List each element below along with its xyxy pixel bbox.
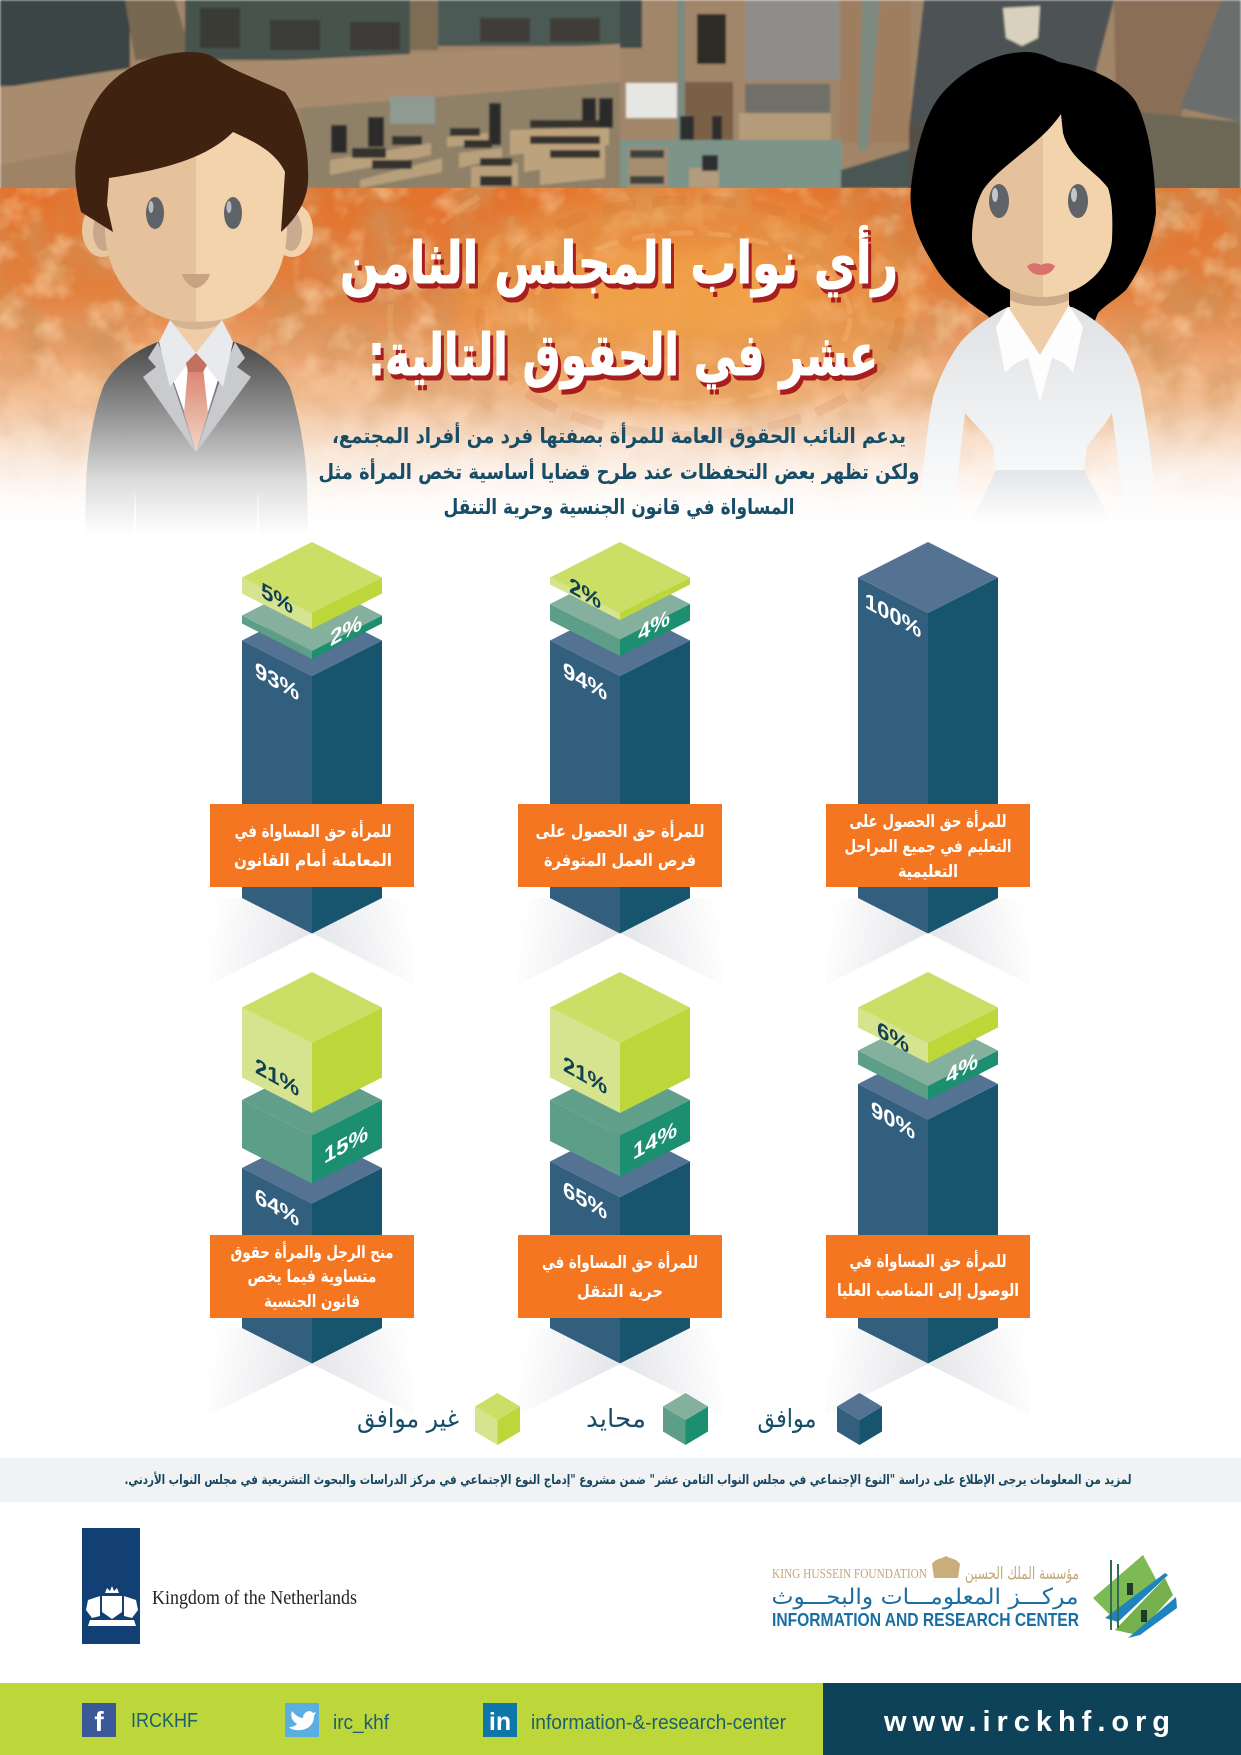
logo: Information and Research Center: KING HUSSEIN FOUNDATION bbox=[772, 1567, 927, 1582]
man: jacket bbox=[85, 342, 308, 535]
chart column: access to available jobs: 2% bbox=[569, 573, 601, 615]
man: hair bbox=[75, 52, 308, 232]
logo: Information and Research Center: مركـــز المعلومـــات والبحـــوث bbox=[772, 1585, 1078, 1610]
linkedin handle: information-&-research-center bbox=[531, 1712, 786, 1734]
icon: twitter bbox=[285, 1703, 319, 1737]
title: رأي نواب المجلس الثامن bbox=[340, 225, 898, 298]
woman: neck bbox=[1010, 285, 1069, 356]
woman: hair bbox=[910, 52, 1156, 328]
man: tie bbox=[184, 353, 208, 452]
chart column: education: للمرأة حق الحصول على bbox=[850, 810, 1006, 832]
woman: lips bbox=[1027, 263, 1055, 275]
intro text bbox=[318, 421, 920, 519]
man: chin shadow bbox=[170, 314, 222, 330]
man: collar bbox=[159, 320, 233, 387]
chart column: nationality law: 64% bbox=[255, 1184, 299, 1232]
intro text: يدعم النائب الحقوق العامة للمرأة بصفتها فرد من أفراد المجتمع، bbox=[332, 421, 906, 448]
woman: chin shadow bbox=[1010, 290, 1069, 306]
logo: Information and Research Center bbox=[772, 1555, 1177, 1638]
chart column: access to available jobs: فرص العمل المتوفرة bbox=[544, 851, 696, 871]
header photo: parliament chamber bbox=[0, 0, 1241, 190]
chart column: top positions: للمرأة حق المساواة في bbox=[850, 1250, 1006, 1272]
legend: neutral bbox=[586, 1393, 708, 1445]
woman: shirt bbox=[920, 307, 1157, 527]
chart column: nationality law: قانون الجنسية bbox=[264, 1292, 360, 1312]
chart column: equality before the law: للمرأة حق المساواة في bbox=[234, 820, 392, 842]
woman: eyes bbox=[989, 184, 1088, 218]
footer bar bbox=[0, 1683, 1241, 1755]
twitter handle: irc_khf bbox=[333, 1712, 389, 1734]
woman: collar bbox=[996, 305, 1083, 402]
legend: neutral: محايد bbox=[586, 1404, 646, 1433]
legend: disagree: غير موافق bbox=[357, 1404, 459, 1433]
title: عشر في الحقوق التالية: bbox=[368, 321, 878, 390]
chart column: education: التعليمية bbox=[898, 862, 958, 882]
chart column: nationality law: متساوية فيما يخص bbox=[248, 1267, 376, 1287]
chart column: equality before the law: 2% bbox=[330, 610, 362, 652]
column shadows bbox=[209, 898, 1030, 1415]
legend: agree bbox=[758, 1393, 882, 1445]
chart column: education: 100% bbox=[865, 588, 921, 644]
chart column: nationality law: منح الرجل والمرأة حقوق bbox=[230, 1241, 394, 1263]
chart column: freedom of movement: 14% bbox=[633, 1117, 677, 1165]
legend: disagree bbox=[357, 1393, 520, 1445]
header orange overlay with chamber texture bbox=[0, 188, 1241, 500]
chart column: nationality law: 15% bbox=[324, 1121, 368, 1169]
chart column: access to available jobs: 94% bbox=[563, 658, 607, 706]
logo: Information and Research Center: INFORMATION AND RESEARCH CENTER bbox=[772, 1610, 1079, 1630]
man: face bbox=[105, 130, 287, 322]
chart column: freedom of movement bbox=[518, 972, 722, 1364]
man: shirt front bbox=[173, 353, 218, 447]
chart column: freedom of movement: للمرأة حق المساواة في bbox=[542, 1251, 698, 1273]
icon: linkedin: in bbox=[489, 1708, 511, 1736]
man: neck bbox=[170, 298, 222, 356]
icon: coat of arms bbox=[86, 1586, 138, 1626]
title bbox=[340, 225, 898, 390]
chart column: education: التعليم في جميع المراحل bbox=[844, 837, 1012, 857]
woman: skirt bbox=[970, 470, 1113, 525]
chart column: top positions: 90% bbox=[871, 1097, 915, 1145]
woman: face bbox=[972, 114, 1112, 297]
logo: Information and Research Center: مؤسسة الملك الحسين bbox=[965, 1564, 1079, 1584]
icon: IRC mark bbox=[1093, 1555, 1177, 1638]
chart column: top positions: 6% bbox=[877, 1017, 909, 1059]
legend bbox=[357, 1393, 882, 1445]
logo: Kingdom of the Netherlands bbox=[82, 1528, 357, 1644]
woman character bbox=[910, 52, 1157, 527]
chart column: equality before the law: 93% bbox=[255, 658, 299, 706]
chart column: equality before the law bbox=[210, 542, 414, 934]
chart column: access to available jobs bbox=[518, 542, 722, 934]
more information strip bbox=[0, 1458, 1241, 1502]
intro text: ولكن تظهر بعض التحفظات عند طرح قضايا أساسية تخص المرأة مثل bbox=[318, 457, 920, 484]
man: lapels bbox=[143, 342, 251, 453]
icon: linkedin bbox=[483, 1703, 517, 1737]
legend: agree: موافق bbox=[758, 1404, 816, 1433]
man: nose bbox=[182, 274, 210, 288]
logo: Kingdom of the Netherlands: Kingdom of the Netherlands bbox=[152, 1587, 357, 1609]
man: eyes bbox=[146, 197, 242, 229]
man: sleeve slits bbox=[133, 490, 260, 535]
chart column: freedom of movement: 21% bbox=[563, 1052, 607, 1100]
chart column: equality before the law: 5% bbox=[261, 578, 293, 620]
facebook handle: IRCKHF bbox=[131, 1710, 198, 1732]
chart column: freedom of movement: 65% bbox=[563, 1177, 607, 1225]
icon: facebook bbox=[82, 1703, 116, 1737]
man: ears bbox=[82, 203, 313, 257]
chart column: education bbox=[826, 542, 1030, 934]
icon: crown bbox=[932, 1556, 960, 1578]
chart column: access to available jobs: 4% bbox=[638, 605, 670, 647]
chart column: nationality law: 21% bbox=[255, 1054, 299, 1102]
chart column: access to available jobs: للمرأة حق الحصول على bbox=[536, 820, 704, 842]
chart column: nationality law bbox=[210, 972, 414, 1364]
chart column: top positions: الوصول إلى المناصب العليا bbox=[837, 1281, 1019, 1301]
chart column: top positions: 4% bbox=[946, 1048, 978, 1090]
chart column: top positions bbox=[826, 972, 1030, 1364]
man character bbox=[75, 52, 313, 535]
intro text: المساواة في قانون الجنسية وحرية التنقل bbox=[444, 495, 794, 519]
chart column: equality before the law: المعاملة أمام القانون bbox=[234, 849, 392, 871]
icon: facebook: f bbox=[94, 1706, 104, 1737]
chart column: freedom of movement: حرية التنقل bbox=[577, 1282, 663, 1302]
website: www.irckhf.org bbox=[883, 1706, 1170, 1738]
